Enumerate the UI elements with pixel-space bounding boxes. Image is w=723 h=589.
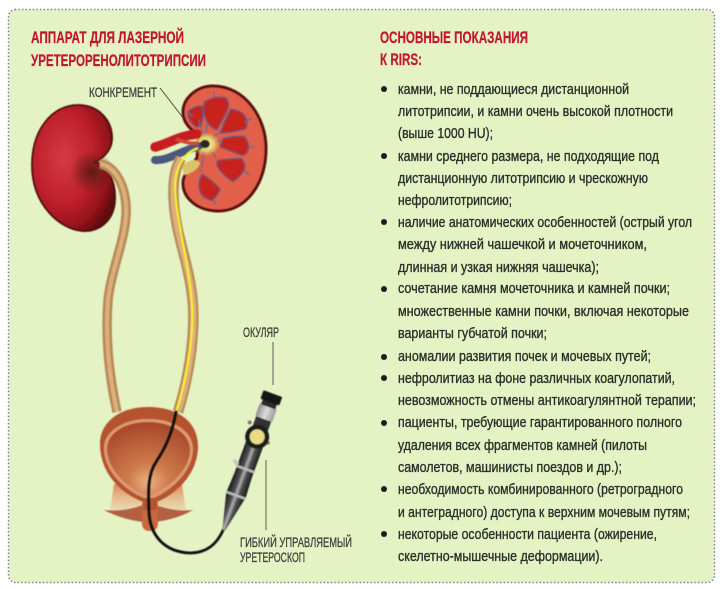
list item 8 [381, 481, 690, 521]
flexible cable [149, 412, 224, 553]
right ureter [173, 158, 193, 412]
list item 2 [381, 148, 659, 209]
list item 3: длинная и узкая нижняя чашечка); [398, 259, 599, 276]
illustration: right kidney section with stone [155, 86, 266, 413]
list item 4: варианты губчатой почки; [398, 325, 547, 342]
calyx branches [187, 91, 256, 205]
list item 7: самолетов, машинисты поездов и др.); [398, 459, 622, 476]
heading: indications: К RIRS: [380, 51, 422, 69]
yellow guide wire [175, 148, 198, 413]
list item 1: (выше 1000 HU); [398, 125, 493, 142]
illustration: bladder [100, 407, 198, 531]
kidney lobes [188, 97, 249, 200]
list item 5: аномалии развития почек и мочевых путей; [398, 348, 651, 365]
label: stone [89, 85, 184, 119]
artery [155, 134, 197, 147]
list item 2: нефролитотрипсию; [398, 192, 512, 209]
heading: device title [31, 28, 206, 70]
label: stone: КОНКРЕМЕНТ [89, 85, 157, 100]
pelvis glow [192, 132, 220, 156]
list item 1 [381, 81, 673, 142]
illustration: flexible ureteroscope [149, 388, 286, 553]
list item 4: сочетание камня мочеточника и камней почки; [398, 280, 670, 297]
vein [155, 146, 199, 160]
list item 3 [381, 214, 692, 276]
list item 9 [381, 526, 657, 565]
heading: indications [380, 29, 528, 69]
list item 9: скелетно-мышечные деформации). [398, 548, 603, 565]
label: flexible ureteroscope: УРЕТЕРОСКОП [240, 550, 305, 565]
handle [209, 388, 286, 535]
list item 1: литотрипсии, и камни очень высокой плотности [398, 103, 673, 120]
label: flexible ureteroscope: ГИБКИЙ УПРАВЛЯЕМЫЙ [240, 535, 352, 550]
list item 2: дистанционную литотрипсию и чрескожную [398, 170, 648, 187]
label: flexible ureteroscope [240, 460, 352, 565]
heading: indications: ОСНОВНЫЕ ПОКАЗАНИЯ [380, 29, 528, 47]
stone [200, 140, 210, 148]
label: eyepiece: ОКУЛЯР [243, 325, 279, 340]
heading: device title: АППАРАТ ДЛЯ ЛАЗЕРНОЙ [31, 28, 184, 47]
list item 7 [381, 414, 682, 476]
list item 9: некоторые особенности пациента (ожирение, [398, 526, 657, 543]
label: eyepiece [243, 325, 279, 385]
list item 6 [381, 370, 696, 409]
list item 3: между нижней чашечкой и мочеточником, [398, 236, 647, 253]
list item 1: камни, не поддающиеся дистанционной [398, 81, 629, 98]
list item 2: камни среднего размера, не подходящие под [398, 148, 659, 165]
list item 4 [381, 280, 689, 342]
kidney body [183, 86, 266, 211]
bullet list: indications [381, 81, 696, 565]
illustration: left kidney and ureter [32, 105, 126, 412]
heading: device title: УРЕТЕРОРЕНОЛИТОТРИПСИИ [31, 52, 206, 70]
list item 7: удаления всех фрагментов камней (пилоты [398, 437, 647, 454]
